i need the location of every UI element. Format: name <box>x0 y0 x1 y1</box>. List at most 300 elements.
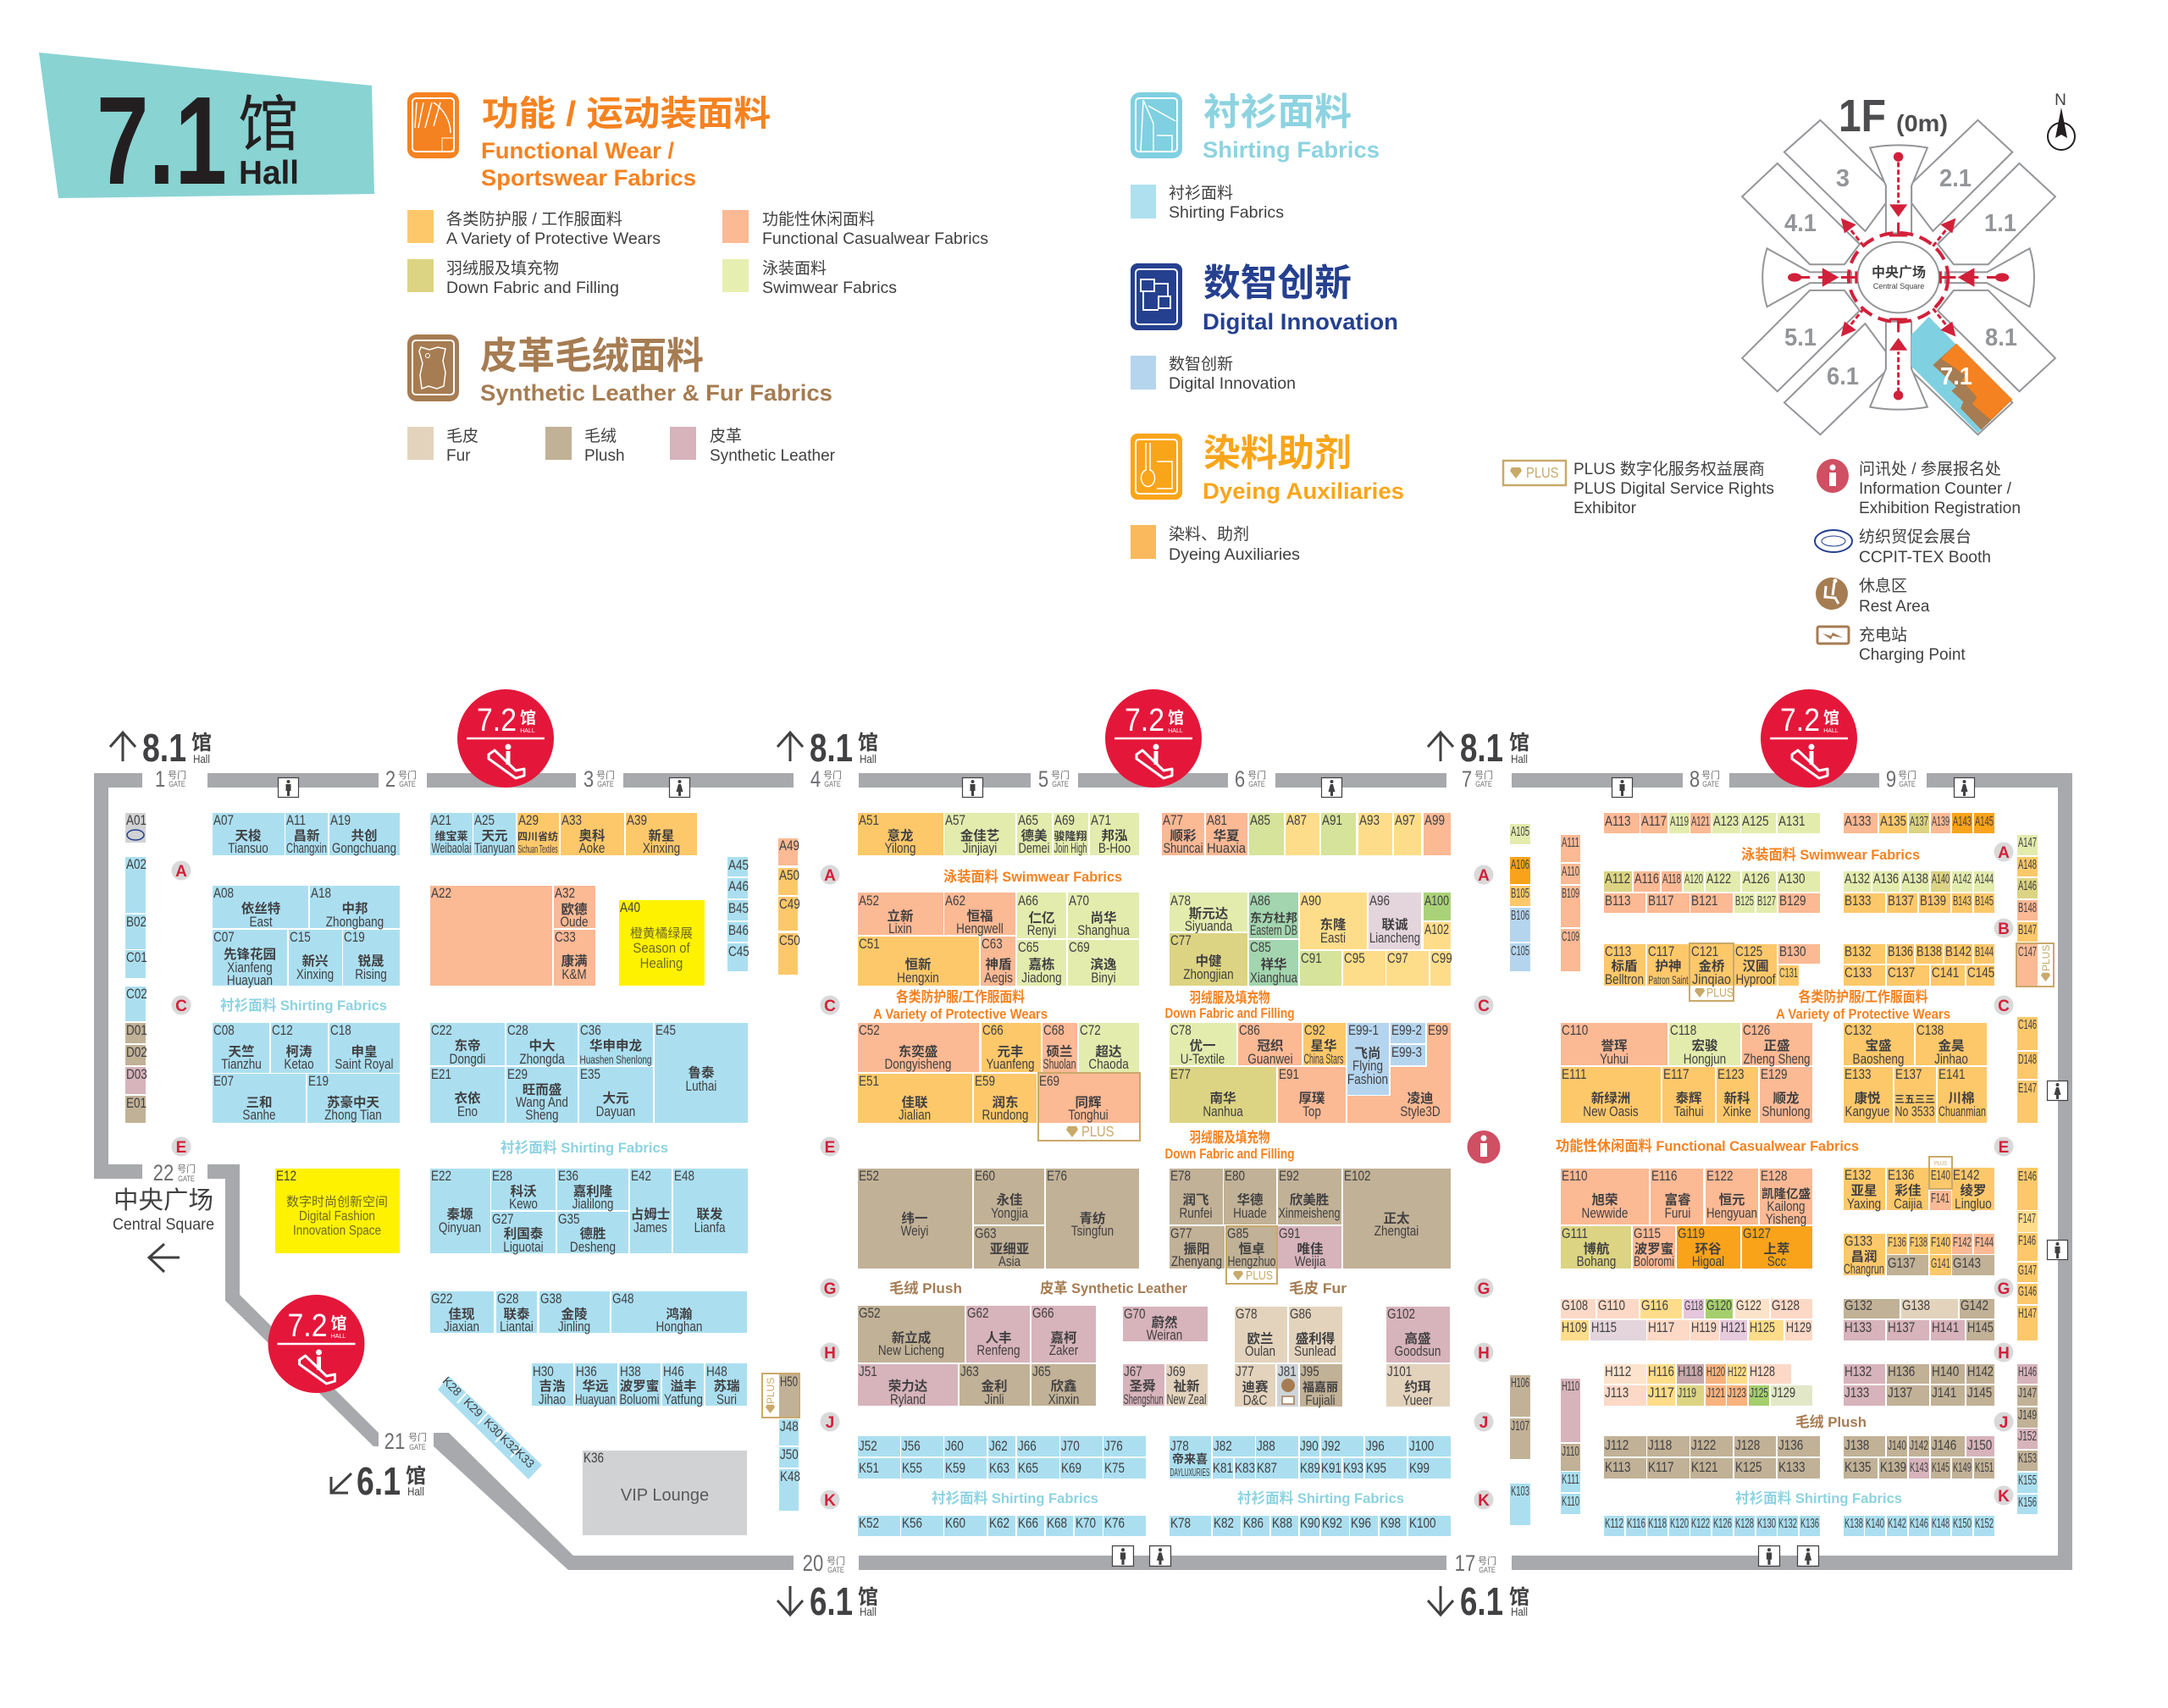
block C08-E19: 柯涛 <box>285 1044 312 1059</box>
block G78-J95: Fujiali <box>1305 1393 1336 1408</box>
shirting row K138-K152: K140 <box>1866 1517 1884 1531</box>
row A51-A71: A71 <box>1091 813 1111 828</box>
block G22-G48: Jinling <box>558 1319 590 1335</box>
column A49-C50: A49 <box>779 838 799 854</box>
block C52-E69: Yuanfeng <box>986 1057 1035 1072</box>
block E132-G143: G143 <box>1953 1256 1981 1271</box>
far-right column E146-K156: K156 <box>2018 1495 2037 1510</box>
legend: functional wear: Sportswear Fabrics <box>481 165 696 191</box>
escalator to 7.2 (middle): 馆 <box>1168 708 1184 727</box>
diagonal booths K28-K33: K32 <box>498 1432 523 1456</box>
icon: shirt <box>1131 92 1182 158</box>
gate labels: GATE <box>827 1566 844 1574</box>
block C08-E19: Sanhe <box>242 1108 276 1123</box>
block C113-C131: 护神 <box>1655 959 1682 974</box>
block C132-E141: 金昊 <box>1938 1037 1965 1053</box>
gate labels: GATE <box>1702 780 1719 788</box>
far-right column A147-E147: B147 <box>2018 923 2037 937</box>
block A78-C99: A86 <box>1250 893 1270 909</box>
shirting block A07-A19 <box>213 813 400 856</box>
rows G132-H145: H145 <box>1967 1320 1994 1335</box>
block C132-E141: E141 <box>1938 1067 1966 1082</box>
zone labels: 衬衫面料 Shirting Fabrics <box>932 1490 1098 1506</box>
central square direction: Central Square <box>113 1216 214 1234</box>
block E110-G127: Higoal <box>1692 1254 1724 1269</box>
block B132-C145: B138 <box>1916 944 1942 959</box>
rows A112-B129: B129 <box>1779 893 1806 909</box>
diagonal booths K28-K33: K30 <box>482 1416 506 1440</box>
key map labels <box>1784 165 2017 390</box>
row A77-A99: A97 <box>1395 813 1415 828</box>
block C52-E69: Shuolan <box>1043 1057 1076 1072</box>
plush rows J112-K133: K121 <box>1691 1460 1718 1475</box>
block H30-H48: H38 <box>620 1364 641 1379</box>
central square direction: 中央广场 <box>113 1186 213 1214</box>
block A52-C69: Hengxin <box>897 970 939 986</box>
legend: charging point: Charging Point <box>1859 646 1966 664</box>
block C113-C131: C131 <box>1779 966 1798 981</box>
column A45-C45: A45 <box>728 858 749 873</box>
plush block E78-E102: G85 <box>1227 1226 1249 1241</box>
block A78-C99: A102 <box>1424 922 1449 937</box>
plush block E52-E76 <box>858 1169 1139 1269</box>
column H50-K48: PLUS <box>765 1378 777 1404</box>
shirting rows J78-K99: K93 <box>1343 1461 1363 1476</box>
central square direction <box>113 1186 214 1272</box>
block A52-C69: C69 <box>1069 940 1090 955</box>
shirting rows J52-K75: J62 <box>989 1439 1008 1454</box>
icon: leather hide <box>407 334 459 401</box>
legend: PLUS exhibitor <box>1503 460 1774 517</box>
block C110-E129 <box>1561 1023 1812 1123</box>
block E110-G127: 环谷 <box>1695 1241 1722 1257</box>
legend: shirting <box>1131 91 1380 222</box>
block A78-C99: Zhongjian <box>1183 967 1234 982</box>
rows H112-J129 <box>1604 1364 1812 1406</box>
block G78-J95 <box>1235 1307 1342 1408</box>
shirting rows J78-K99: J90 <box>1300 1439 1319 1454</box>
shirting row K138-K152: K138 <box>1844 1517 1863 1531</box>
block C110-E129: Yuhui <box>1600 1052 1629 1067</box>
block C08-E19: Ketao <box>284 1057 314 1072</box>
block C08-E19: E19 <box>308 1074 329 1089</box>
zone labels <box>220 847 1950 1506</box>
block E132-G143: Yaxing <box>1847 1197 1881 1212</box>
rows H112-J129: H122 <box>1728 1365 1746 1379</box>
block A78-C99: A100 <box>1424 893 1449 909</box>
far-right column E146-K156: G146 <box>2018 1285 2037 1299</box>
direction: to hall 6.1 middle: 6.1 <box>810 1579 853 1623</box>
plush block E52-E76: E52 <box>859 1169 879 1184</box>
block G78-J95: J81 <box>1278 1364 1297 1379</box>
far-right column A147-E147: D148 <box>2018 1053 2037 1067</box>
shirting row K78-K100: K90 <box>1300 1516 1320 1531</box>
block C132-E141: 三五三三 <box>1894 1093 1935 1105</box>
block H30-H48: H36 <box>576 1364 597 1379</box>
block B132-C145: B132 <box>1844 944 1872 959</box>
plush block E78-E102: Huade <box>1233 1206 1267 1221</box>
rows H132-J145: H140 <box>1932 1364 1959 1379</box>
plush block E78-E102: Weijia <box>1295 1254 1326 1269</box>
gate labels: 4 <box>810 767 821 793</box>
aisle markers: C <box>1478 998 1490 1015</box>
block C113-C131: C121 <box>1691 944 1718 959</box>
booths A21-A39: Weibaolai <box>432 841 471 856</box>
block G102-J101: 约珥 <box>1404 1379 1431 1395</box>
block G52-J65: Jinli <box>984 1392 1004 1407</box>
aisle markers: A <box>175 863 187 881</box>
booths A21-A39: A25 <box>474 813 495 828</box>
block E110-G127: E122 <box>1706 1169 1734 1184</box>
shirting rows J78-K99: 帝来喜 <box>1172 1452 1208 1466</box>
block A08-C19 <box>213 886 400 988</box>
plush block E78-E102: 正太 <box>1383 1211 1410 1226</box>
gate labels: 5 <box>1038 767 1048 793</box>
block C110-E129: 泰辉 <box>1675 1091 1702 1106</box>
block G70-J69: 圣舜 <box>1129 1378 1156 1394</box>
gate labels: 6 <box>1235 767 1245 793</box>
rows G108-H129: H115 <box>1591 1320 1617 1335</box>
aisle markers: G <box>824 1280 836 1298</box>
block E22-E48: 联发 <box>696 1206 723 1222</box>
gate labels: GATE <box>597 780 614 788</box>
plush block E78-E102: E92 <box>1279 1169 1299 1184</box>
block A22-C33: 康满 <box>561 953 588 969</box>
legend: dyeing auxiliaries: Dyeing Auxiliaries <box>1203 478 1404 504</box>
rows A132-B145: A144 <box>1975 872 1994 887</box>
shirting row K112-K136: K128 <box>1735 1517 1754 1531</box>
legend: dyeing auxiliaries: Dyeing Auxiliaries <box>1169 546 1300 564</box>
diagonal booths K28-K33 <box>438 1374 542 1479</box>
rows A132-B145: A138 <box>1902 871 1928 887</box>
block G52-J65: 荣力达 <box>888 1379 928 1394</box>
block G70-J69: J67 <box>1124 1364 1142 1379</box>
plush rows J138-K151: J140 <box>1888 1439 1906 1453</box>
far-right column E146-K156: H146 <box>2018 1365 2037 1379</box>
block C52-E69: 润东 <box>992 1094 1019 1110</box>
block A08-C19: 先锋花园 <box>224 946 276 962</box>
legend: information counter: 问讯处 / 参展报名处 <box>1859 460 2001 478</box>
legend: functional wear <box>407 92 988 297</box>
legend: dyeing auxiliaries: 染料、助剂 <box>1169 525 1249 544</box>
column A111-K110: C109 <box>1562 930 1579 944</box>
far-left booth column: D03 <box>126 1067 147 1082</box>
block A08-C19: 新兴 <box>301 953 329 969</box>
zone labels: 衬衫面料 Shirting Fabrics <box>1735 1490 1902 1506</box>
block C08-E19: 天竺 <box>228 1043 255 1059</box>
rows H112-J129: J121 <box>1706 1386 1725 1401</box>
shirting row K52-K76: K70 <box>1076 1516 1096 1531</box>
rows H112-J129: H116 <box>1648 1364 1674 1379</box>
rows G108-H129: H125 <box>1750 1320 1775 1335</box>
far-right column A147-E147: B148 <box>2018 901 2037 915</box>
plush rows J138-K151: J146 <box>1932 1438 1956 1453</box>
plush block E78-E102: 唯佳 <box>1297 1241 1324 1257</box>
block C110-E129: E117 <box>1663 1067 1690 1082</box>
block E110-G127: Boloromi <box>1634 1254 1674 1269</box>
legend: dyeing auxiliaries <box>1131 433 1404 564</box>
gate labels: 17 <box>1455 1551 1475 1577</box>
gate labels: 号门 <box>408 1431 427 1443</box>
block G70-J69: G70 <box>1124 1307 1146 1322</box>
row A51-A71: Jinjiayi <box>963 841 997 856</box>
block C78-E99: 冠织 <box>1257 1038 1284 1053</box>
gate labels: 1 <box>155 767 165 793</box>
block A08-C19: 锐晟 <box>357 953 384 969</box>
legend: information counter: Exhibition Registration <box>1859 500 2021 517</box>
aisle markers: J <box>1479 1414 1488 1432</box>
shirting row K52-K76: K62 <box>989 1516 1009 1531</box>
block A78-C99 <box>1170 893 1452 986</box>
direction: to hall 8.1 left: 馆 <box>191 732 212 755</box>
far-right column A147-E147: C147 <box>2018 945 2037 959</box>
rows G108-H129 <box>1561 1298 1812 1340</box>
legend: leather and fur: 皮革 <box>710 427 742 445</box>
shirting row K78-K100: K92 <box>1322 1516 1342 1531</box>
aisle markers: A <box>1478 867 1490 885</box>
rows H132-J145 <box>1844 1364 1994 1406</box>
shirting block A07-A19: 昌新 <box>293 827 320 843</box>
block A78-C99: 祥华 <box>1260 956 1287 972</box>
escalator to 7.2 (right) <box>1761 689 1857 788</box>
block C78-E99: 飞尚 <box>1354 1046 1381 1061</box>
shirting row K138-K152: K152 <box>1975 1517 1994 1531</box>
escalator to 7.2 (lower left): 馆 <box>330 1313 347 1333</box>
block C08-E19: E07 <box>213 1074 234 1089</box>
block C132-E141: Jinhao <box>1934 1052 1968 1067</box>
block A08-C19: A18 <box>311 886 331 901</box>
block G102-J101: G102 <box>1387 1307 1415 1322</box>
far-left booth column <box>125 813 147 1123</box>
plush block E78-E102 <box>1170 1169 1451 1284</box>
block G22-G48: G48 <box>612 1291 634 1307</box>
plush rows J112-K133: K117 <box>1648 1460 1674 1475</box>
block A08-C19: C15 <box>290 930 311 945</box>
block G102-J101: J101 <box>1387 1364 1412 1379</box>
block E110-G127: E110 <box>1562 1169 1588 1184</box>
shirting row K138-K152: K142 <box>1888 1517 1906 1531</box>
gate labels: GATE <box>1899 780 1916 788</box>
aisle markers: B <box>1998 920 2010 938</box>
rows G108-H129: H117 <box>1648 1320 1674 1335</box>
escalator to 7.2 (left) <box>457 689 554 788</box>
PLUS badge E69: PLUS <box>1081 1124 1114 1140</box>
block C52-E69: E51 <box>859 1074 879 1089</box>
legend: functional wear: 羽绒服及填充物 <box>446 259 559 278</box>
row A113-A131: A121 <box>1691 815 1710 829</box>
block A22-C33: 欧德 <box>561 902 588 917</box>
row A77-A99: A85 <box>1250 813 1270 828</box>
rows H132-J145: H136 <box>1888 1364 1915 1379</box>
column A45-C45: C45 <box>728 944 749 959</box>
block A52-C69: C63 <box>982 937 1003 952</box>
aisle markers: A <box>824 867 836 885</box>
shirting rows J78-K99: K99 <box>1409 1461 1430 1476</box>
far-right column A147-E147 <box>2016 835 2054 1123</box>
feature booth: Digital Fashion Innovation Space: Digital Fashion <box>299 1209 375 1224</box>
column A49-C50: A50 <box>779 868 799 883</box>
block H30-H48: Suri <box>716 1392 737 1407</box>
column A49-C50: C50 <box>779 933 800 948</box>
block E132-G143: E142 <box>1953 1168 1980 1183</box>
block G52-J65: Renfeng <box>976 1343 1020 1358</box>
gate labels: 号门 <box>1478 1555 1496 1567</box>
shirting row K52-K76: K56 <box>902 1516 922 1531</box>
plush rows J112-K133: K113 <box>1605 1460 1631 1475</box>
legend: shirting: 衬衫面料 <box>1203 91 1352 133</box>
key map labels: 中央广场 <box>1872 265 1926 280</box>
block C08-E19: 申皇 <box>351 1044 378 1059</box>
block G70-J69: Weiran <box>1147 1328 1182 1343</box>
far-right column E146-K156: F146 <box>2018 1234 2036 1248</box>
legend: leather and fur: Synthetic Leather & Fur Fabrics <box>480 380 832 406</box>
block C113-C131: C125 <box>1735 944 1762 959</box>
gate labels: GATE <box>1052 780 1069 788</box>
block G22-G48: G22 <box>431 1291 453 1307</box>
rows G108-H129: H119 <box>1691 1320 1717 1335</box>
block E22-E48: Qinyuan <box>439 1220 481 1235</box>
legend: leather and fur: 皮革毛绒面料 <box>480 335 704 377</box>
plush block E78-E102: 恒卓 <box>1238 1241 1265 1257</box>
block A52-C69: C51 <box>859 937 880 952</box>
zone labels: 毛绒 Plush <box>889 1280 962 1296</box>
block C78-E99: C92 <box>1304 1023 1325 1038</box>
column H50-K48: J50 <box>780 1447 799 1462</box>
floor label 1F: (0m) <box>1896 110 1948 136</box>
rows G108-H129: G122 <box>1736 1298 1762 1313</box>
shirting row K112-K136: K130 <box>1757 1517 1776 1531</box>
rows A132-B145: B143 <box>1953 894 1972 909</box>
aisle markers: K <box>824 1492 836 1510</box>
legend: functional wear: A Variety of Protective Wears <box>446 230 661 248</box>
gate labels: 3 <box>583 767 594 793</box>
rows H112-J129: J125 <box>1750 1386 1768 1401</box>
gate labels: 号门 <box>177 1163 196 1175</box>
block C78-E99 <box>1170 1023 1451 1123</box>
zone labels: 各类防护服/工作服面料 <box>1799 988 1927 1005</box>
block C78-E99: Guanwei <box>1247 1052 1293 1067</box>
legend: charging point <box>1817 626 1966 664</box>
shirting rows J78-K99: K95 <box>1366 1461 1386 1476</box>
block C22-E45: Wang And <box>516 1095 568 1110</box>
block B132-C145: C141 <box>1932 965 1959 981</box>
block C78-E99: Style3D <box>1400 1104 1441 1119</box>
block A78-C99: A90 <box>1301 893 1321 909</box>
block E132-G143: F141 <box>1931 1191 1950 1206</box>
rows G108-H129: H109 <box>1562 1320 1587 1335</box>
block A52-C69: 嘉栋 <box>1028 956 1055 972</box>
block C78-E99: 南华 <box>1209 1090 1236 1106</box>
block G52-J65: J65 <box>1032 1364 1051 1379</box>
far-right column E146-K156: J149 <box>2018 1408 2037 1423</box>
floor label 1F: 1F <box>1839 91 1886 141</box>
plush rows J138-K151: K135 <box>1844 1460 1872 1475</box>
block C52-E69: Jialian <box>899 1108 931 1123</box>
legend: functional wear: Functional Wear / <box>481 138 675 163</box>
escalator to 7.2 (right): HALL <box>1823 728 1839 734</box>
block G102-J101: Goodsun <box>1395 1344 1441 1359</box>
block C08-E19: C12 <box>272 1023 293 1038</box>
plush block E52-E76: 亚细亚 <box>990 1241 1029 1257</box>
block C52-E69: 佳联 <box>901 1095 928 1110</box>
rows A112-B129: A112 <box>1605 871 1630 887</box>
legend: leather and fur: 毛绒 <box>584 427 617 445</box>
block C52-E69: E59 <box>975 1074 995 1089</box>
block C22-E45: 中大 <box>528 1038 556 1053</box>
direction: to hall 8.1 right <box>1428 726 1529 770</box>
block C52-E69: 硕兰 <box>1046 1044 1073 1059</box>
feature booth: Season of Healing <box>619 900 705 986</box>
plush rows J138-K151: J138 <box>1844 1438 1869 1453</box>
row A51-A71: 邦泓 <box>1101 828 1128 843</box>
legend: functional wear: 功能 / 运动装面料 <box>482 94 771 133</box>
block A78-C99: 东方杜邦 <box>1250 911 1297 925</box>
gate labels: 号门 <box>1051 769 1070 781</box>
block C22-E45: Sheng <box>525 1108 559 1123</box>
block C132-E141: E133 <box>1844 1067 1872 1082</box>
rows H112-J129: J119 <box>1678 1386 1696 1401</box>
shirting row K52-K76: K68 <box>1047 1516 1067 1531</box>
block B132-C145 <box>1844 944 1994 986</box>
plush block E52-E76: E60 <box>975 1169 995 1184</box>
shirting rows J52-K75: K69 <box>1061 1461 1081 1476</box>
escalator to 7.2 (right): 7.2 <box>1780 703 1820 738</box>
shirting rows J78-K99 <box>1170 1436 1451 1479</box>
legend: PLUS exhibitor: PLUS Digital Service Rights <box>1573 480 1774 498</box>
block G52-J65: 欣鑫 <box>1050 1378 1077 1394</box>
block E22-E48: Desheng <box>570 1240 616 1255</box>
escalator to 7.2 (lower left) <box>268 1295 364 1393</box>
block A52-C69: 神盾 <box>985 957 1012 972</box>
plush block E78-E102: Zhengtai <box>1374 1224 1419 1239</box>
far-right column E146-K156: G147 <box>2018 1263 2037 1278</box>
rows A112-B129: A120 <box>1684 872 1703 887</box>
block C08-E19: C18 <box>330 1023 351 1038</box>
column A111-K110: B109 <box>1562 887 1579 901</box>
block C110-E129: 宏骏 <box>1691 1037 1718 1053</box>
block C22-E45: E45 <box>655 1023 676 1038</box>
rows H112-J129: H118 <box>1678 1364 1703 1379</box>
shirting row K78-K100: K82 <box>1214 1516 1234 1531</box>
block C110-E129: 顺龙 <box>1773 1091 1800 1106</box>
block C113-C131: Hyproof <box>1736 972 1776 987</box>
block A78-C99: C85 <box>1250 940 1271 955</box>
block C08-E19: Zhong Tian <box>324 1108 382 1123</box>
block C22-E45: 华申申龙 <box>589 1037 642 1053</box>
zone labels: 泳装面料 Swimwear Fabrics <box>943 869 1122 885</box>
far-left booth column: A02 <box>126 857 147 872</box>
plush rows J138-K151: J142 <box>1910 1439 1928 1453</box>
block G70-J69: 蔚然 <box>1151 1314 1178 1330</box>
plush rows J138-K151: K149 <box>1953 1461 1972 1475</box>
block C132-E141: C138 <box>1916 1023 1944 1038</box>
shirting row K52-K76 <box>858 1516 1146 1536</box>
hall title tag: Hall <box>239 155 299 191</box>
block C78-E99: E99-1 <box>1348 1023 1379 1038</box>
block G102-J101 <box>1386 1307 1450 1408</box>
block G78-J95: J95 <box>1301 1364 1319 1379</box>
plush block E52-E76: 永佳 <box>996 1192 1023 1208</box>
block C110-E129: 新科 <box>1723 1090 1750 1106</box>
block E22-E48: E36 <box>558 1169 578 1184</box>
block C52-E69: C68 <box>1043 1023 1065 1038</box>
shirting rows J78-K99: J92 <box>1322 1439 1341 1454</box>
block G52-J65: J51 <box>859 1364 877 1379</box>
block C110-E129: 正盛 <box>1763 1037 1790 1053</box>
shirting row K112-K136: K116 <box>1627 1517 1645 1531</box>
plush rows J138-K151: K139 <box>1880 1460 1906 1475</box>
shirting row K112-K136: K132 <box>1778 1517 1797 1531</box>
